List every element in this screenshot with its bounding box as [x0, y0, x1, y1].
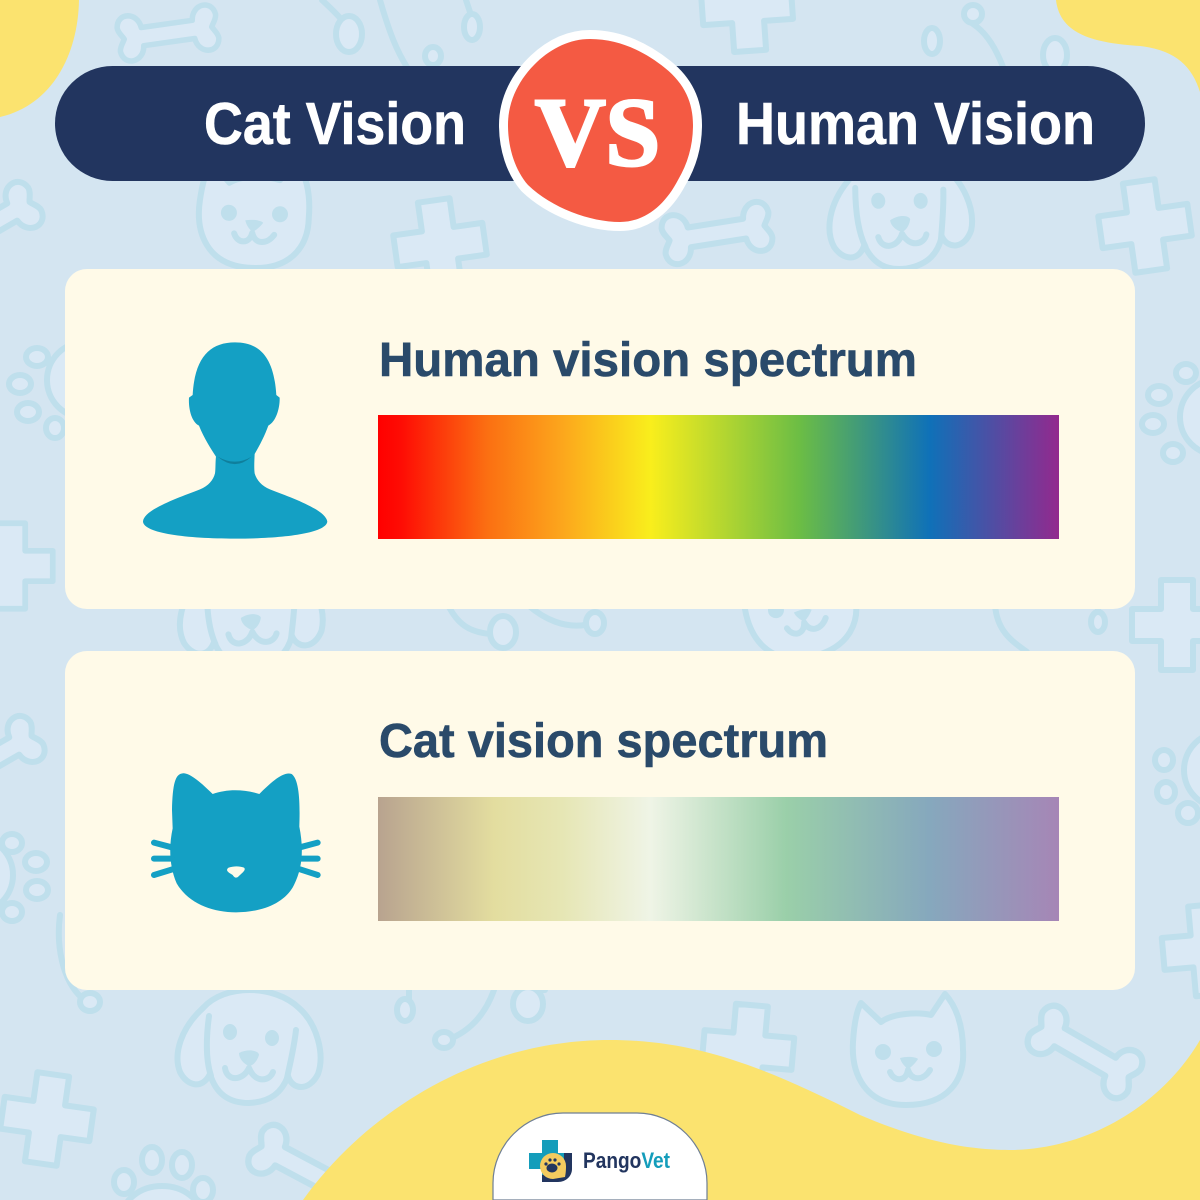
heading: Human Vision: Human Vision	[736, 91, 1095, 157]
cat whiskers	[154, 843, 318, 875]
VS text: VS	[535, 79, 660, 186]
panel: cat vision	[65, 651, 1135, 990]
yellow wave: bottom	[303, 1040, 1200, 1200]
icon: cat silhouette	[154, 773, 318, 912]
heading: Cat Vision: Cat Vision	[204, 91, 466, 157]
yellow blob: top left	[0, 0, 79, 117]
spectrum: human	[378, 415, 1059, 539]
spectrum: cat	[378, 797, 1059, 921]
icon: human silhouette	[143, 342, 327, 539]
logo badge	[493, 1113, 707, 1200]
yellow blob: top right	[1056, 0, 1200, 92]
logo wordmark: PangoVet	[583, 1148, 671, 1173]
heading: human vision spectrum: Human vision spectrum	[379, 334, 917, 387]
chin line	[218, 457, 252, 464]
logo icon	[529, 1140, 572, 1182]
VS badge	[508, 39, 693, 222]
heading: cat vision spectrum: Cat vision spectrum	[379, 715, 828, 768]
panel: human vision	[65, 269, 1135, 609]
header bar	[55, 66, 1145, 181]
cat nose	[227, 866, 245, 878]
